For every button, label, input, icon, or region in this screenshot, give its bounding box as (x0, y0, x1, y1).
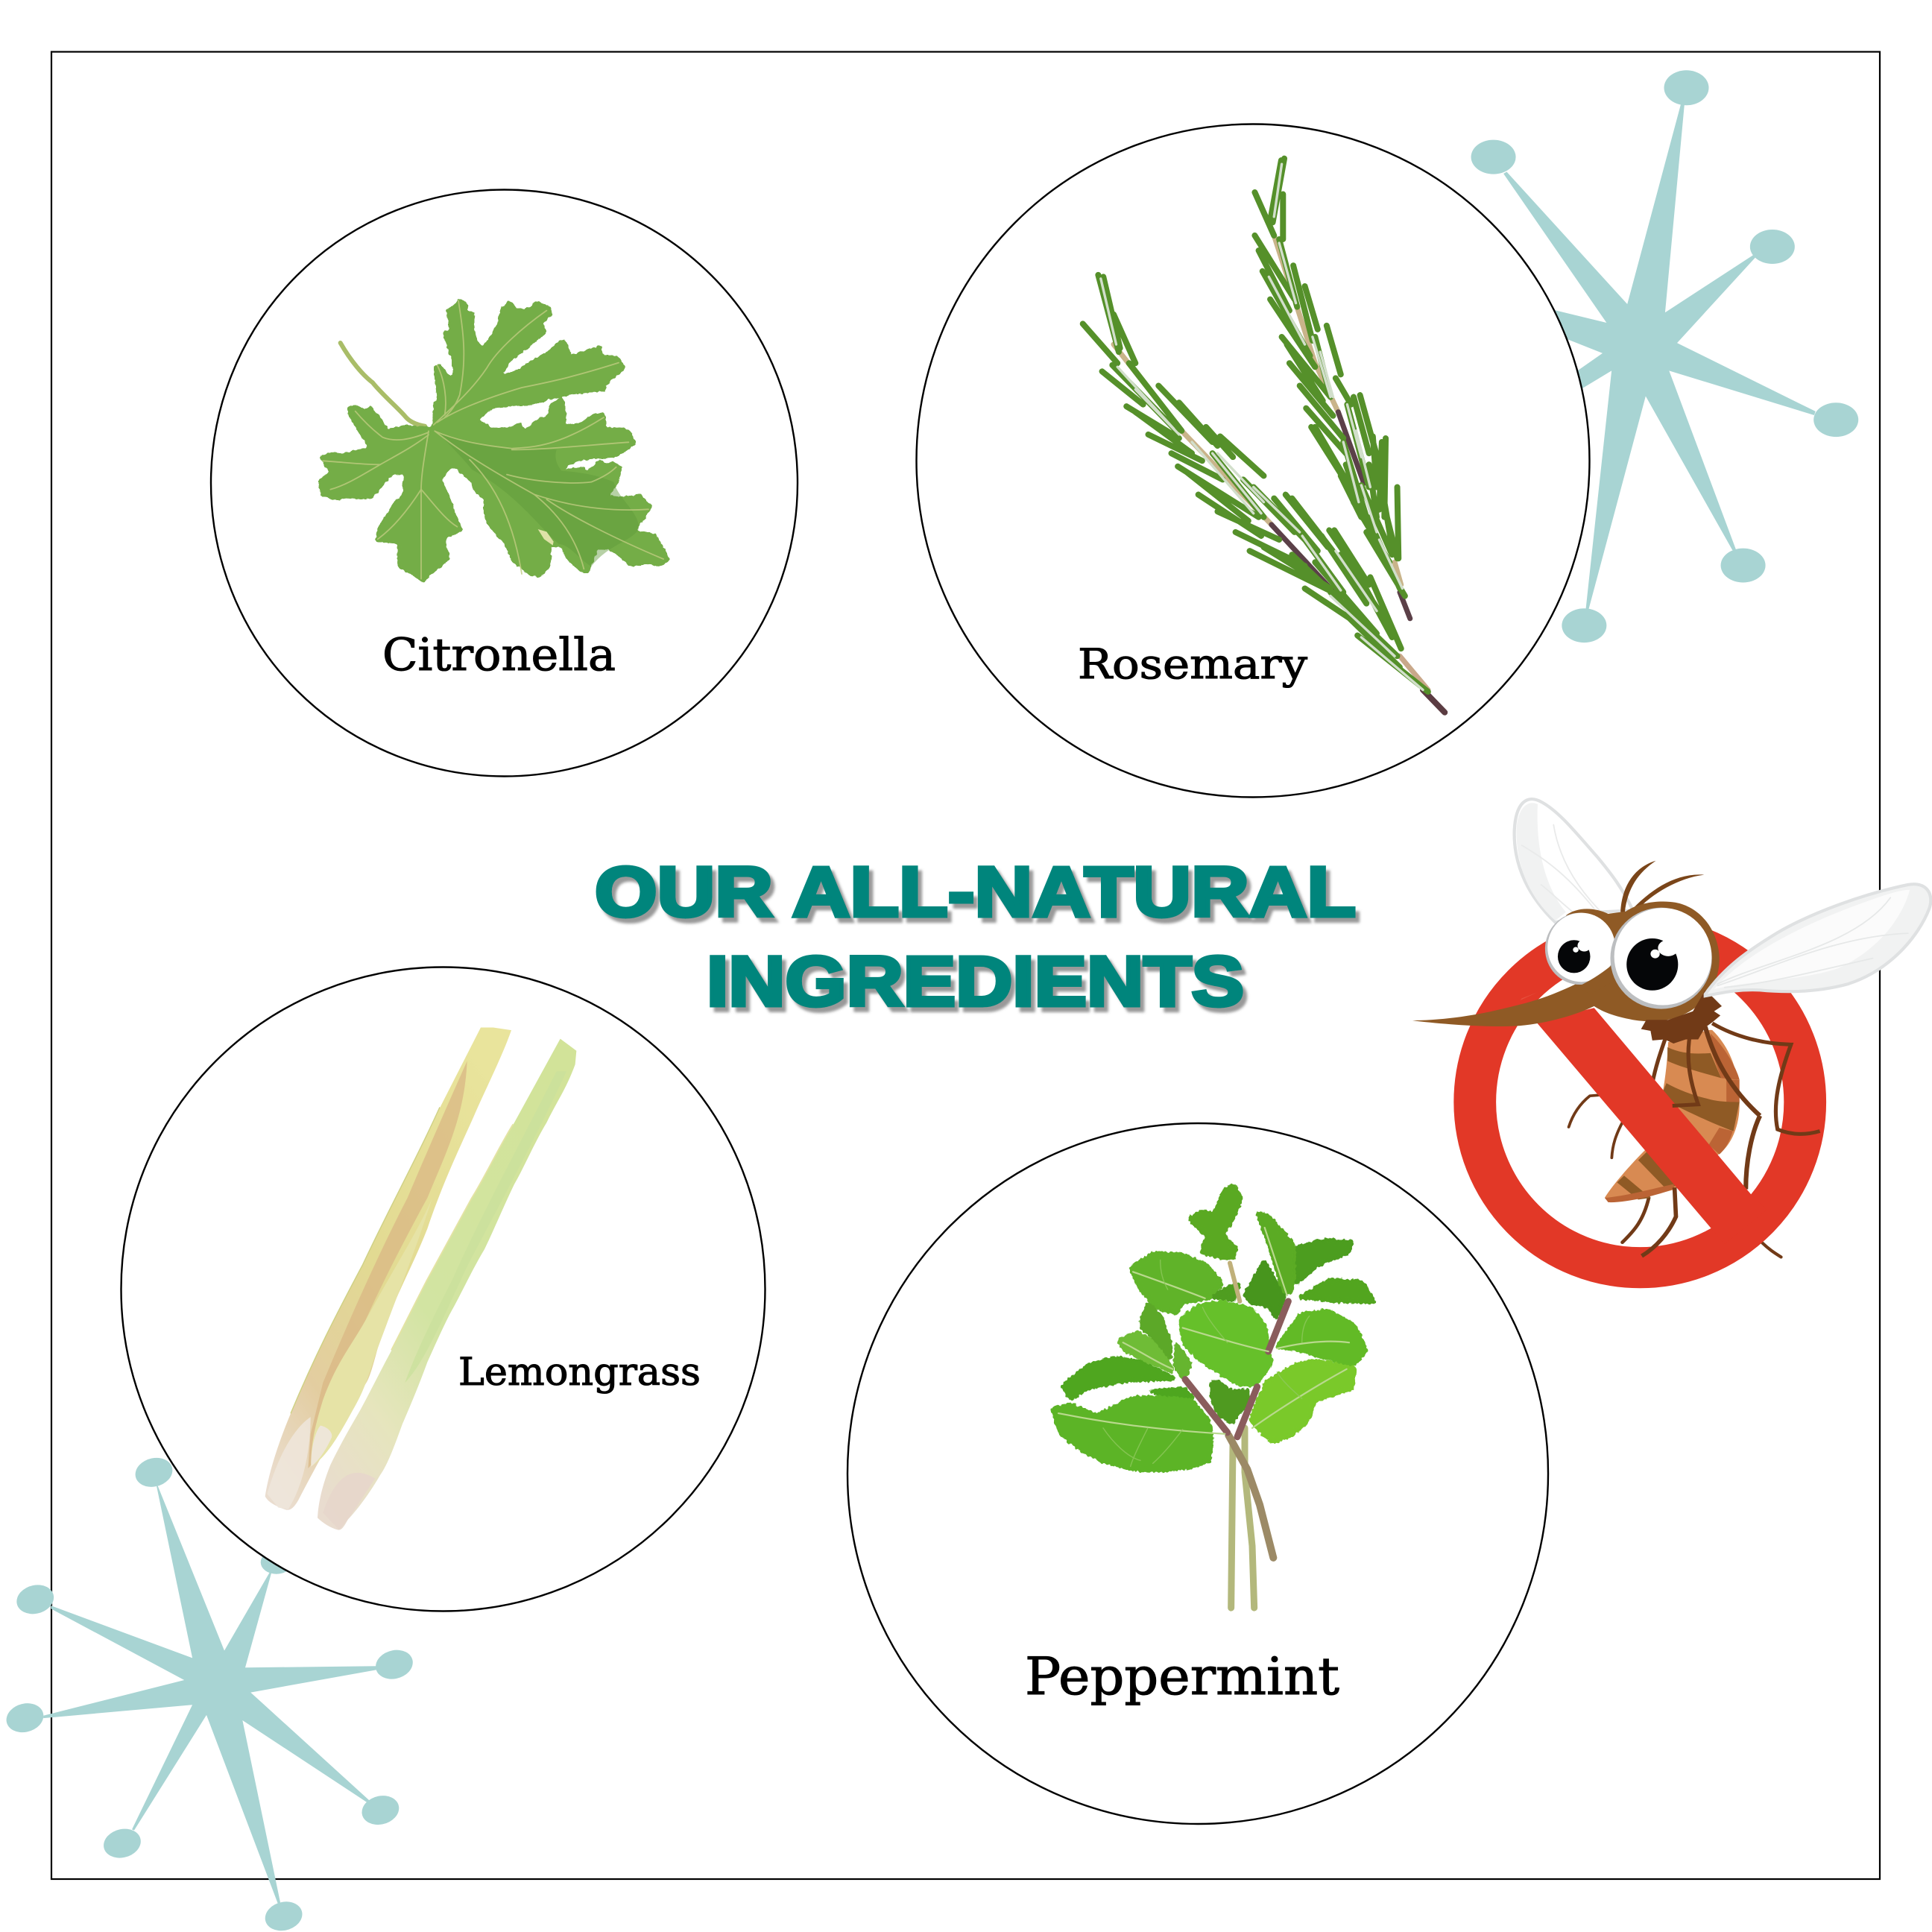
label: Citronella: Citronella (382, 629, 616, 681)
image: peppermint sprig (1049, 1182, 1377, 1608)
decorative starburst: top right (1471, 70, 1858, 643)
panel: citronella (211, 189, 798, 777)
circle: peppermint (847, 1123, 1548, 1824)
mosquito: right wing (1705, 884, 1931, 996)
circle: lemongrass (121, 967, 765, 1611)
image: lemongrass stalks (265, 1027, 576, 1530)
mosquito: neck mane (1641, 990, 1722, 1044)
mosquito: small eye (1545, 913, 1615, 994)
mosquito: antennae (1620, 861, 1704, 912)
circle: citronella (211, 189, 798, 777)
image: rosemary sprigs (1083, 159, 1445, 713)
image: citronella leaf (318, 297, 669, 583)
decorative starburst: bottom left (4, 1455, 415, 1932)
mosquito: rear legs (1569, 1041, 1781, 1257)
panel: peppermint (847, 1123, 1548, 1824)
icon: red prohibition ring and bar (1475, 936, 1805, 1268)
mosquito: head and proboscis (1412, 901, 1722, 1044)
title: INGREDIENTS (707, 942, 1244, 1021)
label: Rosemary: Rosemary (1078, 640, 1307, 688)
circle: rosemary (917, 124, 1589, 798)
title: OUR ALL-NATURAL (595, 853, 1356, 932)
label: Lemongrass: Lemongrass (458, 1351, 701, 1395)
mosquito: left wing (1515, 799, 1633, 922)
mosquito: front legs (1642, 1023, 1820, 1256)
label: Peppermint: Peppermint (1025, 1647, 1339, 1707)
panel: rosemary (917, 124, 1589, 798)
icon: crossed-out mosquito (1412, 799, 1931, 1268)
title (595, 853, 1356, 1021)
panel: lemongrass (121, 967, 765, 1611)
mosquito: large eye (1610, 908, 1712, 1009)
mosquito: abdomen (1605, 1030, 1760, 1202)
